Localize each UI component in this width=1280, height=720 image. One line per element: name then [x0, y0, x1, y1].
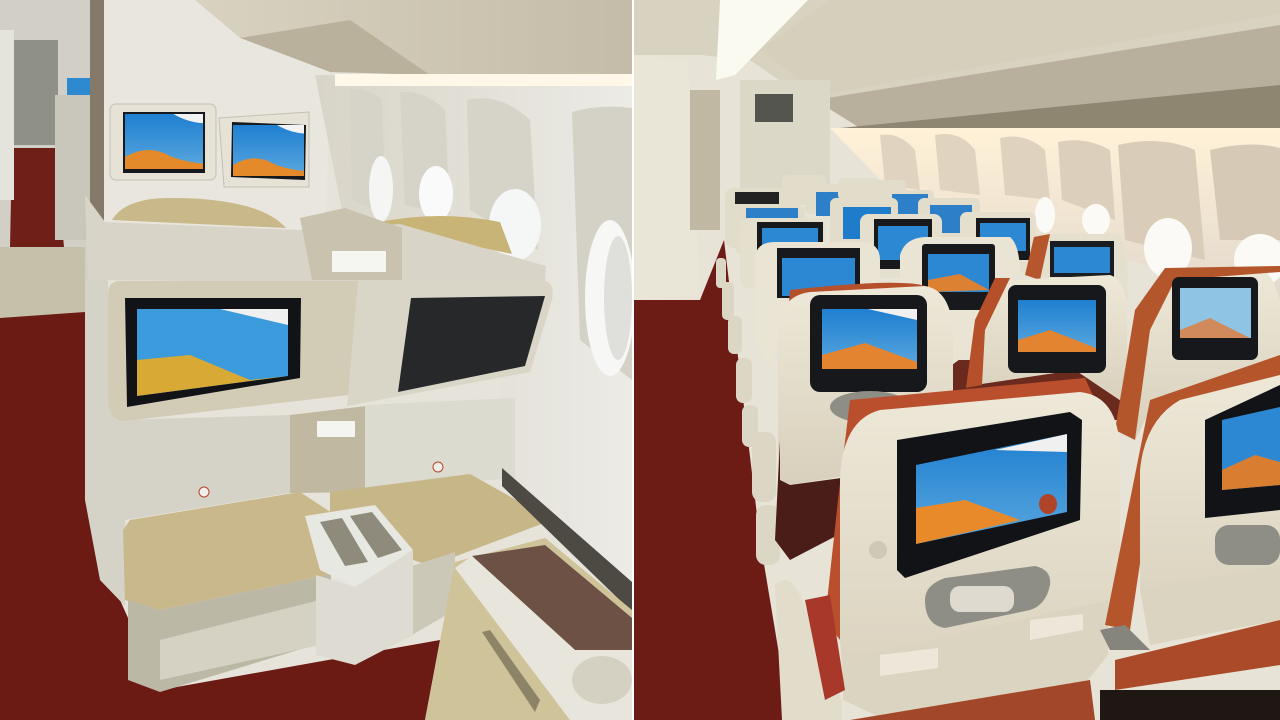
distant seats [725, 175, 1036, 288]
side console [425, 538, 632, 720]
wall vent [502, 468, 632, 612]
white divider [632, 0, 634, 720]
front monitor panel left [108, 281, 360, 421]
row seats [755, 234, 1128, 370]
carpet [634, 240, 790, 720]
left bulkhead [634, 55, 700, 300]
left photo: business class cabin [0, 0, 635, 720]
seat row 3 [778, 266, 1280, 485]
rear monitors [110, 104, 309, 187]
shadow between rows [950, 360, 1120, 420]
ceiling [634, 0, 1280, 108]
ceiling [195, 0, 632, 80]
bench cushions [123, 474, 552, 610]
right front seat [1100, 355, 1280, 720]
front seat main [825, 378, 1120, 716]
sticker: lower panel [317, 421, 355, 437]
windows [369, 156, 635, 376]
front monitor panel right [347, 281, 553, 406]
carpet [0, 312, 440, 720]
footwell [128, 574, 331, 692]
armrests aisle [716, 258, 780, 565]
right photo: economy class cabin [634, 0, 1280, 720]
headrests [112, 198, 286, 228]
front armrest [775, 580, 842, 720]
seat shell upper [85, 195, 546, 284]
partition wall [104, 0, 330, 230]
aisle background [0, 0, 104, 320]
side wall [315, 75, 632, 590]
seat shell lower [85, 280, 290, 606]
right wall [830, 128, 1280, 300]
no-smoking markers [199, 462, 443, 497]
storage tray [305, 505, 413, 665]
